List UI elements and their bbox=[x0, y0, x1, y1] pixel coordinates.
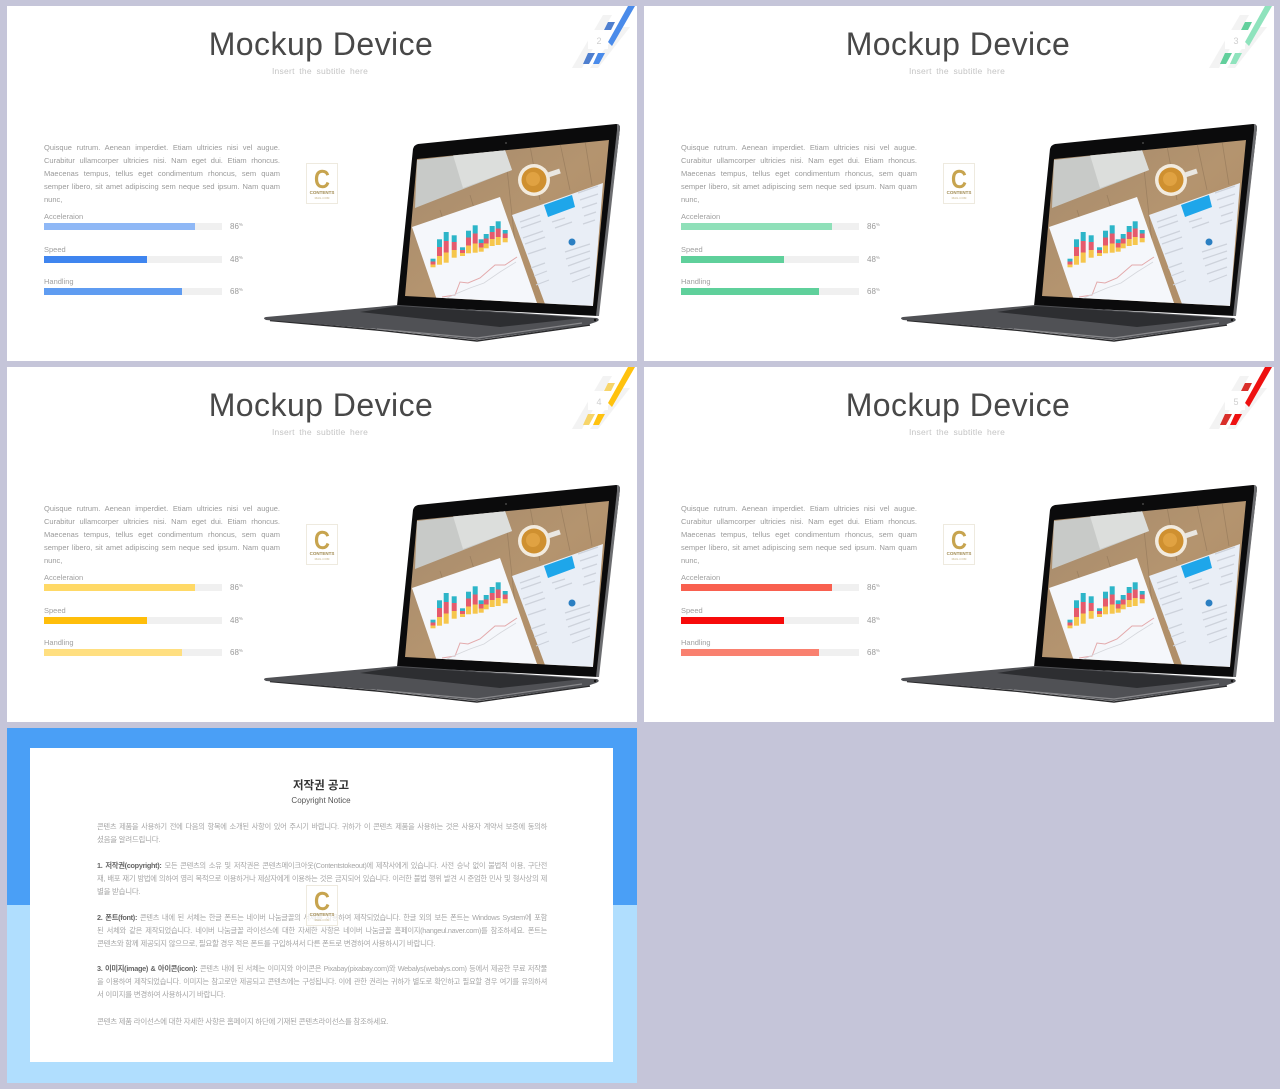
metric: handling 68% bbox=[44, 277, 243, 296]
metric: acceleration 86% bbox=[44, 212, 243, 231]
body text bbox=[681, 143, 917, 204]
metric: acceleration 86% bbox=[44, 573, 243, 592]
logo: C bbox=[314, 886, 330, 916]
logo bbox=[306, 163, 338, 204]
title: Mockup Device bbox=[846, 26, 1070, 62]
metric: speed 48%: 48% bbox=[867, 616, 880, 625]
metric: acceleration 86%: Acceleraion bbox=[44, 212, 83, 221]
metric: handling 68%: Handling bbox=[44, 277, 74, 286]
intro text: 셨음을 알려드립니다. bbox=[97, 835, 160, 844]
metric: speed 48% bbox=[44, 245, 243, 264]
laptop mockup bbox=[264, 485, 620, 703]
section 3: image and icon: 을 이용하여 제작되었습니다. 이미지는 참고로만 제공되고 콘텐츠에는 구성됩니다. 이에 관한 권리는 귀하가 별도로 확인하고 필요할 경우 여기를 유의하셔 bbox=[97, 977, 547, 986]
closing line: 콘텐츠 제품 라이선스에 대한 자세한 사항은 홈페이지 하단에 기재된 콘텐츠라이선스를 참조하세요. bbox=[97, 1017, 388, 1026]
section 3: image and icon: 서 이미지를 변경하여 사용하시기 바랍니다. bbox=[97, 990, 225, 999]
body text bbox=[681, 504, 917, 565]
section 2: font: 된 서체와 같은 제작되었습니다. 네이버 나눔글꼴 라이선스에 대한 자세한 사항은 네이버 나눔글꼴 홈페이지(hangeul.naver.com)를 참조하세요. 폰트는 bbox=[97, 926, 547, 935]
logo: CONTENTS bbox=[310, 190, 334, 195]
laptop mockup bbox=[901, 485, 1257, 703]
section 1: copyright: 별을 받습니다. bbox=[97, 887, 140, 896]
metric: handling 68%: 68% bbox=[867, 287, 880, 296]
copyright subheading: Copyright Notice bbox=[291, 796, 351, 805]
metric: speed 48%: 48% bbox=[867, 255, 880, 264]
metric: handling 68% bbox=[681, 277, 880, 296]
logo: MAIL.COM bbox=[315, 918, 329, 922]
panel: yellow mockup slide bbox=[7, 367, 637, 722]
metric: acceleration 86%: Acceleraion bbox=[681, 212, 720, 221]
section 3: image and icon: 3. 이미지(image) & 아이콘(icon): 콘텐츠 내에 된 서체는 이미지와 아이콘은 Pixabay(pixabay.com)와 Webalys(webalys.com) 등에서 제공한 무료 저작물 bbox=[97, 964, 547, 973]
corner icon with page number 4: 4 bbox=[596, 397, 602, 407]
body text: Maecenas tempus, tellus eget condimentum rhoncus, sem quam bbox=[44, 169, 280, 178]
copyright heading: 저작권 공고 bbox=[293, 780, 349, 792]
logo: CONTENTS bbox=[947, 190, 971, 195]
title: Mockup Device bbox=[209, 26, 433, 62]
body text: nunc, bbox=[44, 195, 62, 204]
logo bbox=[306, 524, 338, 565]
metric: handling 68%: Handling bbox=[44, 638, 74, 647]
metric: handling 68%: 68% bbox=[867, 648, 880, 657]
body text: semper libero, sit amet adipiscing sem neque sed ipsum. Nam quam bbox=[44, 182, 280, 191]
metric: speed 48% bbox=[44, 606, 243, 625]
body text: Quisque rutrum. Aenean imperdiet. Etiam ultricies nisi vel augue. bbox=[44, 143, 280, 152]
subtitle: Insert the subtitle here bbox=[909, 427, 1005, 437]
metric: acceleration 86%: 86% bbox=[230, 222, 243, 231]
subtitle: Insert the subtitle here bbox=[272, 427, 368, 437]
subtitle: Insert the subtitle here bbox=[272, 66, 368, 76]
section 1: copyright: 재, 배포 재기 방법에 의하여 영리 목적으로 이용하거나 제삼자에게 이용하는 것은 금지되어 있습니다. 이러한 불법 행위 발견 시 준엄한 민사 및 형사상의 제 bbox=[97, 874, 547, 883]
intro text: 콘텐츠 제품을 사용하기 전에 다음의 항목에 소개된 사항이 있어 주시기 바랍니다. 귀하가 이 콘텐츠 제품을 사용하는 것은 사용자 계약서 보증에 동의하 bbox=[97, 822, 547, 831]
panel: blue mockup slide bbox=[7, 6, 637, 361]
body text: semper libero, sit amet adipiscing sem neque sed ipsum. Nam quam bbox=[681, 543, 917, 552]
body text: nunc, bbox=[681, 195, 699, 204]
corner icon with page number 2: 2 bbox=[596, 36, 602, 46]
panel: red mockup slide bbox=[644, 367, 1274, 722]
body text: Curabitur ullamcorper ultricies nisi. Nam eget dui. Etiam rhoncus. bbox=[681, 517, 917, 526]
body text: Maecenas tempus, tellus eget condimentum rhoncus, sem quam bbox=[681, 530, 917, 539]
panel: copyright notice slide bbox=[7, 728, 637, 1083]
logo: CONTENTS bbox=[947, 551, 971, 556]
metric: acceleration 86%: 86% bbox=[867, 583, 880, 592]
logo: CONTENTS bbox=[310, 551, 334, 556]
body text: Curabitur ullamcorper ultricies nisi. Nam eget dui. Etiam rhoncus. bbox=[44, 156, 280, 165]
metric: speed 48%: 48% bbox=[230, 255, 243, 264]
metric: acceleration 86%: Acceleraion bbox=[44, 573, 83, 582]
laptop mockup bbox=[264, 124, 620, 342]
body text: Quisque rutrum. Aenean imperdiet. Etiam ultricies nisi vel augue. bbox=[681, 504, 917, 513]
metric: speed 48%: Speed bbox=[44, 245, 66, 254]
intro text bbox=[97, 822, 548, 844]
metric: acceleration 86%: Acceleraion bbox=[681, 573, 720, 582]
metric: speed 48% bbox=[681, 606, 880, 625]
body text bbox=[44, 143, 280, 204]
metric: speed 48% bbox=[681, 245, 880, 264]
logo: MAIL.COM bbox=[315, 557, 329, 561]
body text: Curabitur ullamcorper ultricies nisi. Nam eget dui. Etiam rhoncus. bbox=[44, 517, 280, 526]
laptop mockup bbox=[901, 124, 1257, 342]
section 1: copyright: 1. 저작권(copyright): 모든 콘텐츠의 소유 및 저작권은 콘텐츠메이크아웃(Contentstokeout)에 제작사에게 있습니다. 사전 승낙 없이 불법적 이용, 구단전 bbox=[97, 861, 547, 870]
section 2: font bbox=[97, 913, 548, 948]
logo: C bbox=[951, 525, 967, 555]
subtitle: Insert the subtitle here bbox=[909, 66, 1005, 76]
metric: handling 68%: Handling bbox=[681, 277, 711, 286]
logo bbox=[943, 163, 975, 204]
metric: acceleration 86% bbox=[681, 212, 880, 231]
logo bbox=[306, 885, 338, 926]
logo: C bbox=[314, 164, 330, 194]
body text: nunc, bbox=[681, 556, 699, 565]
section 3: image and icon bbox=[97, 964, 547, 999]
logo: MAIL.COM bbox=[315, 196, 329, 200]
section 2: font: 2. 폰트(font): 콘텐츠 내에 된 서체는 한글 폰트는 네이버 나눔글꼴의 서체를 사용하여 제작되었습니다. 한글 외의 보든 폰트는 Windows System에 포함 bbox=[97, 913, 547, 922]
body text: Quisque rutrum. Aenean imperdiet. Etiam ultricies nisi vel augue. bbox=[44, 504, 280, 513]
logo: MAIL.COM bbox=[952, 557, 966, 561]
metric: speed 48%: Speed bbox=[44, 606, 66, 615]
metric: speed 48%: Speed bbox=[681, 245, 703, 254]
section 2: font: 콘텐츠와 함께 제공되지 않으므로, 필요할 경우 적은 폰트를 구입하셔서 다른 폰트로 변경하여 사용하시기 바랍니다. bbox=[97, 939, 435, 948]
body text: Quisque rutrum. Aenean imperdiet. Etiam ultricies nisi vel augue. bbox=[681, 143, 917, 152]
corner icon with page number 5: 5 bbox=[1233, 397, 1239, 407]
metric: acceleration 86%: 86% bbox=[867, 222, 880, 231]
body text: nunc, bbox=[44, 556, 62, 565]
body text: Maecenas tempus, tellus eget condimentum rhoncus, sem quam bbox=[681, 169, 917, 178]
body text: semper libero, sit amet adipiscing sem neque sed ipsum. Nam quam bbox=[44, 543, 280, 552]
white copyright card bbox=[30, 748, 613, 1062]
corner icon with page number 2 bbox=[572, 6, 635, 68]
metric: speed 48%: 48% bbox=[230, 616, 243, 625]
body text: Curabitur ullamcorper ultricies nisi. Nam eget dui. Etiam rhoncus. bbox=[681, 156, 917, 165]
section 1: copyright bbox=[97, 861, 547, 896]
metric: handling 68%: Handling bbox=[681, 638, 711, 647]
panel: green mockup slide bbox=[644, 6, 1274, 361]
title: Mockup Device bbox=[209, 387, 433, 423]
body text: semper libero, sit amet adipiscing sem neque sed ipsum. Nam quam bbox=[681, 182, 917, 191]
metric: acceleration 86%: 86% bbox=[230, 583, 243, 592]
corner icon with page number 3: 3 bbox=[1233, 36, 1239, 46]
body text bbox=[44, 504, 280, 565]
body text: Maecenas tempus, tellus eget condimentum rhoncus, sem quam bbox=[44, 530, 280, 539]
corner icon with page number 5 bbox=[1209, 367, 1272, 429]
corner icon with page number 3 bbox=[1209, 6, 1272, 68]
logo: C bbox=[314, 525, 330, 555]
metric: handling 68% bbox=[681, 638, 880, 657]
corner icon with page number 4 bbox=[572, 367, 635, 429]
logo: CONTENTS bbox=[310, 912, 334, 917]
metric: handling 68%: 68% bbox=[230, 287, 243, 296]
logo: MAIL.COM bbox=[952, 196, 966, 200]
metric: acceleration 86% bbox=[681, 573, 880, 592]
logo: C bbox=[951, 164, 967, 194]
metric: handling 68% bbox=[44, 638, 243, 657]
metric: speed 48%: Speed bbox=[681, 606, 703, 615]
title: Mockup Device bbox=[846, 387, 1070, 423]
logo bbox=[943, 524, 975, 565]
metric: handling 68%: 68% bbox=[230, 648, 243, 657]
